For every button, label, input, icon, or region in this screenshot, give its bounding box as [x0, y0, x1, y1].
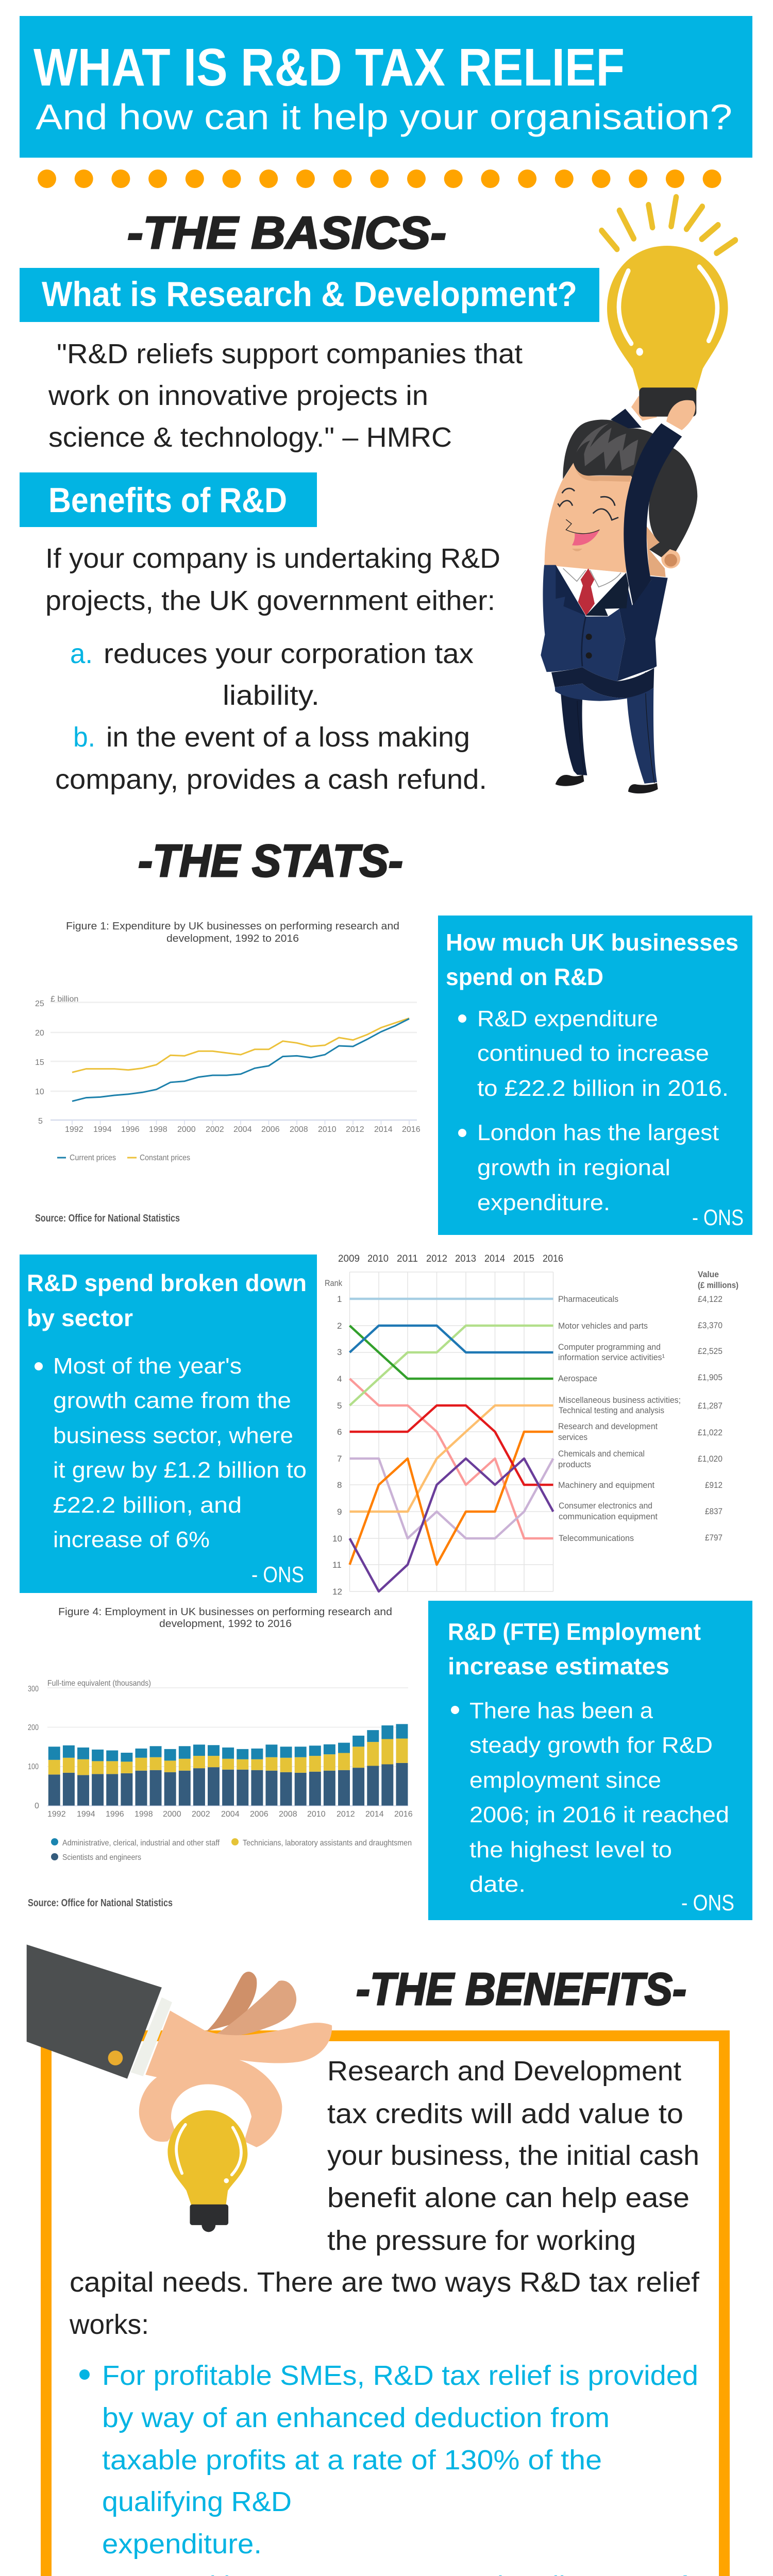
section bar: benefits of R&D [20, 472, 317, 527]
HMRC quote: work on innovative projects in [48, 380, 428, 411]
benefits intro text: the pressure for working [327, 2225, 636, 2256]
bar chart: employment in R&D: development, 1992 to 2016 [159, 1618, 292, 1630]
bar chart: employment in R&D: 2004 [221, 1810, 240, 1819]
line chart: expenditure on R&D: 2006 [261, 1125, 280, 1134]
panel: how much UK businesses spend: R&D expenditure [477, 1006, 658, 1031]
line chart: expenditure on R&D: 20 [35, 1029, 44, 1038]
chart legend: Scientists and engineers [62, 1853, 141, 1862]
bump chart: R&D spend rank by sector: 12 [332, 1587, 342, 1597]
section bar: benefits of R&D: Benefits of R&D [48, 481, 287, 520]
bump chart: R&D spend rank by sector: Research and development [558, 1421, 658, 1431]
bump chart: R&D spend rank by sector: 5 [337, 1401, 342, 1411]
panel: R&D spend broken down by sector: £22.2 billion, and [53, 1493, 242, 1518]
line chart: expenditure on R&D: 2000 [177, 1125, 196, 1134]
benefits bullet list: expenditure. [102, 2529, 262, 2560]
panel: how much UK businesses spend: London has the largest [477, 1120, 719, 1145]
benefits intro text: benefit alone can help ease [327, 2182, 690, 2213]
panel: R&D spend broken down by sector: increase of 6% [53, 1527, 210, 1552]
panel: how much UK businesses spend: How much UK businesses [446, 929, 738, 956]
line chart: expenditure on R&D: 1996 [121, 1125, 140, 1134]
bar chart: employment in R&D: 300 [28, 1685, 39, 1693]
bump chart: R&D spend rank by sector: 3 [337, 1347, 342, 1357]
bar chart: employment in R&D: 2014 [365, 1810, 384, 1819]
panel: R&D spend broken down by sector: by sector [27, 1304, 133, 1331]
bump chart: R&D spend rank by sector: £1,020 [698, 1454, 722, 1464]
benefits explanation text: projects, the UK government either: [45, 585, 495, 616]
panel: R&D spend broken down by sector [20, 1255, 317, 1593]
panel: R&D FTE employment estimates: steady growth for R&D [469, 1733, 713, 1758]
right hand gripping bulb [666, 400, 695, 430]
benefits explanation text: If your company is undertaking R&D [45, 543, 500, 574]
bar chart: employment in R&D: 200 [28, 1723, 39, 1732]
bump chart: R&D spend rank by sector: (£ millions) [698, 1280, 738, 1290]
bar chart: employment in R&D: 2002 [192, 1810, 210, 1819]
panel: R&D FTE employment estimates: date. [469, 1872, 526, 1897]
bump chart: R&D spend rank by sector: 11 [332, 1560, 342, 1570]
benefits intro text: works: [69, 2309, 149, 2340]
HMRC quote: science & technology." – HMRC [48, 422, 452, 453]
HMRC quote [48, 338, 523, 453]
line chart: expenditure on R&D: 2002 [206, 1125, 224, 1134]
bar chart: employment in R&D: 100 [28, 1762, 39, 1771]
bump chart: R&D spend rank by sector: £837 [705, 1506, 722, 1516]
panel: how much UK businesses spend: expenditure. [477, 1190, 610, 1215]
bar chart: employment in R&D: 2006 [250, 1810, 268, 1819]
bump chart: R&D spend rank by sector: £912 [705, 1480, 722, 1490]
line chart: expenditure on R&D: 2016 [402, 1125, 421, 1134]
raised arms [631, 396, 657, 421]
bump chart: R&D spend rank by sector: 2009 [338, 1253, 360, 1264]
bar chart: employment in R&D: 2008 [279, 1810, 297, 1819]
line chart: expenditure on R&D: 2010 [318, 1125, 337, 1134]
chart legend [57, 1154, 190, 1162]
line chart: expenditure on R&D: Source: Office for National Statistics [35, 1213, 180, 1224]
panel: R&D FTE employment estimates [428, 1601, 752, 1920]
panel: how much UK businesses spend: - ONS [692, 1205, 744, 1230]
line chart: expenditure on R&D: development, 1992 to 2016 [166, 933, 299, 944]
panel: how much UK businesses spend: growth in regional [477, 1155, 670, 1180]
panel: R&D FTE employment estimates: R&D (FTE) Employment [448, 1618, 701, 1645]
panel: R&D spend broken down by sector: Most of the year's [53, 1353, 242, 1379]
bump chart: R&D spend rank by sector: Consumer electronics and [559, 1501, 652, 1511]
panel: R&D FTE employment estimates: 2006; in 2016 it reached [469, 1802, 729, 1827]
bump chart: R&D spend rank by sector: 2014 [484, 1253, 505, 1264]
benefits explanation text: a. [70, 638, 93, 669]
panel: how much UK businesses spend [438, 916, 752, 1235]
chart legend: Current prices [70, 1154, 116, 1162]
line chart: expenditure on R&D: 1994 [93, 1125, 112, 1134]
line chart: expenditure on R&D: 2014 [374, 1125, 393, 1134]
eyes and mouth [558, 488, 618, 520]
bar chart: employment in R&D: Figure 4: Employment in UK businesses on performing research and [58, 1606, 392, 1618]
hair [563, 419, 697, 557]
bump chart: R&D spend rank by sector: Computer programming and [558, 1342, 661, 1352]
bar chart: employment in R&D: 1998 [135, 1810, 153, 1819]
bump chart: R&D spend rank by sector: services [558, 1432, 587, 1442]
benefits intro text: capital needs. There are two ways R&D tax relief [70, 2267, 700, 2298]
bump chart: R&D spend rank by sector: Telecommunications [559, 1533, 634, 1543]
line chart: expenditure on R&D: 2012 [346, 1125, 364, 1134]
bar chart: employment in R&D: 1994 [77, 1810, 95, 1819]
bar chart: employment in R&D: 2000 [163, 1810, 181, 1819]
jacket [541, 565, 625, 681]
panel: R&D FTE employment estimates: the highest level to [469, 1837, 672, 1862]
bump chart: R&D spend rank by sector: 2 [337, 1321, 342, 1331]
bump chart: R&D spend rank by sector: Machinery and equipment [558, 1480, 654, 1490]
bump chart: R&D spend rank by sector: 2011 [397, 1253, 418, 1264]
bump chart: R&D spend rank by sector: Motor vehicles and parts [558, 1321, 648, 1331]
benefits explanation text: b. [73, 722, 95, 753]
benefits bullet list: qualifying R&D [102, 2486, 292, 2517]
bump chart: R&D spend rank by sector: Technical testing and analysis [559, 1405, 664, 1415]
line chart: expenditure on R&D: 10 [35, 1088, 44, 1096]
bar chart: employment in R&D: Source: Office for National Statistics [28, 1897, 173, 1909]
bump chart: R&D spend rank by sector: £797 [705, 1533, 722, 1543]
dotted divider [38, 170, 721, 188]
line chart: expenditure on R&D: 25 [35, 999, 44, 1008]
title banner [20, 16, 752, 158]
face [545, 463, 632, 573]
bump chart: R&D spend rank by sector: £1,905 [698, 1372, 722, 1382]
section bar: what is research and development [20, 268, 599, 322]
panel: how much UK businesses spend: spend on R&D [446, 963, 603, 990]
benefits explanation text: company, provides a cash refund. [55, 764, 487, 795]
line chart: expenditure on R&D: 1998 [149, 1125, 167, 1134]
bump chart: R&D spend rank by sector: £2,525 [698, 1346, 722, 1356]
chart legend: Technicians, laboratory assistants and draughtsmen [243, 1839, 412, 1848]
benefits bullet list: For profitable SMEs, R&D tax relief is provided [102, 2360, 698, 2391]
bump chart: R&D spend rank by sector: information service activities¹ [558, 1352, 665, 1362]
benefits bullet list: taxable profits at a rate of 130% of the [102, 2445, 602, 2476]
chart legend [51, 1838, 412, 1862]
bar chart: employment in R&D: 1992 [47, 1810, 66, 1819]
heading: the stats: -THE STATS- [138, 835, 403, 886]
bump chart: R&D spend rank by sector: 2015 [513, 1253, 534, 1264]
bar chart: employment in R&D: 1996 [106, 1810, 124, 1819]
bump chart: R&D spend rank by sector: 2016 [543, 1253, 563, 1264]
bump chart: R&D spend rank by sector: Chemicals and chemical [558, 1449, 645, 1459]
benefits explanation text: liability. [223, 680, 320, 711]
panel: benefits frame [46, 2036, 725, 2576]
benefits explanation text [45, 543, 500, 795]
bump chart: R&D spend rank by sector: £1,022 [698, 1428, 722, 1437]
illustration: hand pinching a light bulb [27, 1944, 332, 2232]
panel: R&D FTE employment estimates: There has been a [469, 1698, 653, 1723]
icon: bulb rays [602, 197, 735, 253]
neck and ear [646, 526, 666, 577]
panel: R&D FTE employment estimates: - ONS [681, 1890, 734, 1916]
benefits intro text [69, 2056, 700, 2340]
bump chart: R&D spend rank by sector: 2013 [455, 1253, 476, 1264]
icon: light bulb [607, 246, 728, 417]
panel: R&D spend broken down by sector: growth came from the [53, 1388, 291, 1413]
panel: R&D spend broken down by sector: R&D spend broken down [27, 1269, 307, 1296]
bump chart: R&D spend rank by sector: Pharmaceuticals [558, 1294, 618, 1304]
right leg [627, 689, 657, 784]
panel: R&D FTE employment estimates: employment since [469, 1768, 661, 1793]
left leg [561, 694, 587, 775]
bar chart: employment in R&D: 2010 [307, 1810, 326, 1819]
bump chart: R&D spend rank by sector: products [558, 1460, 591, 1469]
bar chart: employment in R&D: 2012 [337, 1810, 355, 1819]
panel: how much UK businesses spend: continued to increase [477, 1041, 709, 1066]
line chart: expenditure on R&D: 5 [38, 1117, 43, 1126]
bar chart: employment in R&D: 0 [35, 1802, 39, 1810]
benefits explanation text: reduces your corporation tax [104, 638, 474, 669]
bump chart: R&D spend rank by sector: 10 [332, 1534, 342, 1544]
bump chart: R&D spend rank by sector: 2012 [426, 1253, 447, 1264]
bump chart: R&D spend rank by sector: £1,287 [698, 1401, 722, 1411]
bump chart: R&D spend rank by sector: communication equipment [559, 1512, 658, 1521]
bump chart: R&D spend rank by sector [325, 1253, 738, 1597]
benefits intro text: Research and Development [327, 2056, 681, 2087]
chart legend: Constant prices [140, 1154, 190, 1162]
benefits intro text: your business, the initial cash [327, 2140, 699, 2171]
title banner: WHAT IS R&D TAX RELIEF [33, 38, 625, 97]
bump chart: R&D spend rank by sector: 1 [337, 1294, 342, 1304]
bump chart: R&D spend rank by sector: 9 [337, 1507, 342, 1517]
bump chart: R&D spend rank by sector: 4 [337, 1374, 342, 1384]
line chart: expenditure on R&D [35, 921, 421, 1224]
bump chart: R&D spend rank by sector: Value [698, 1269, 719, 1279]
benefits bullet list: by way of an enhanced deduction from [102, 2402, 610, 2433]
title banner: And how can it help your organisation? [36, 97, 732, 137]
benefits explanation text: in the event of a loss making [106, 722, 470, 753]
line chart: expenditure on R&D: 2008 [290, 1125, 308, 1134]
line chart: expenditure on R&D: 1992 [65, 1125, 83, 1134]
bump chart: R&D spend rank by sector: £3,370 [698, 1320, 722, 1330]
bar chart: employment in R&D: Full-time equivalent (thousands) [47, 1679, 151, 1688]
HMRC quote: "R&D reliefs support companies that [57, 338, 523, 369]
bump chart: R&D spend rank by sector: 7 [337, 1454, 342, 1464]
illustration: man holding up a light bulb [541, 197, 735, 793]
benefits bullet list [79, 2360, 698, 2576]
heading: the basics: -THE BASICS- [127, 207, 446, 258]
bar chart: employment in R&D [28, 1606, 413, 1909]
bump chart: R&D spend rank by sector: 2010 [367, 1253, 389, 1264]
bump chart: R&D spend rank by sector: £4,122 [698, 1294, 722, 1304]
panel: R&D spend broken down by sector: business sector, where [53, 1423, 293, 1448]
heading: the benefits: -THE BENEFITS- [356, 1963, 686, 2014]
section bar: what is research and development: What is Research & Development? [42, 275, 577, 314]
bump chart: R&D spend rank by sector: Rank [325, 1278, 342, 1288]
line chart: expenditure on R&D: £ billion [51, 995, 78, 1004]
bump chart: R&D spend rank by sector: Aerospace [558, 1374, 597, 1383]
line chart: expenditure on R&D: 2004 [233, 1125, 252, 1134]
bar chart: employment in R&D: 2016 [394, 1810, 413, 1819]
bump chart: R&D spend rank by sector: Miscellaneous business activities; [559, 1395, 681, 1405]
panel: R&D spend broken down by sector: it grew by £1.2 billion to [53, 1458, 307, 1483]
bump chart: R&D spend rank by sector: 6 [337, 1427, 342, 1437]
line chart: expenditure on R&D: Figure 1: Expenditure by UK businesses on performing research and [66, 921, 399, 932]
panel: how much UK businesses spend: to £22.2 billion in 2016. [477, 1076, 729, 1101]
bump chart: R&D spend rank by sector: 8 [337, 1480, 342, 1490]
panel: R&D spend broken down by sector: - ONS [251, 1562, 304, 1587]
chart legend: Administrative, clerical, industrial and other staff [62, 1839, 220, 1848]
shoes [556, 775, 658, 793]
line chart: expenditure on R&D: 15 [35, 1058, 44, 1067]
waistband [551, 667, 654, 698]
benefits intro text: tax credits will add value to [327, 2098, 683, 2129]
panel: R&D FTE employment estimates: increase estimates [448, 1653, 669, 1680]
